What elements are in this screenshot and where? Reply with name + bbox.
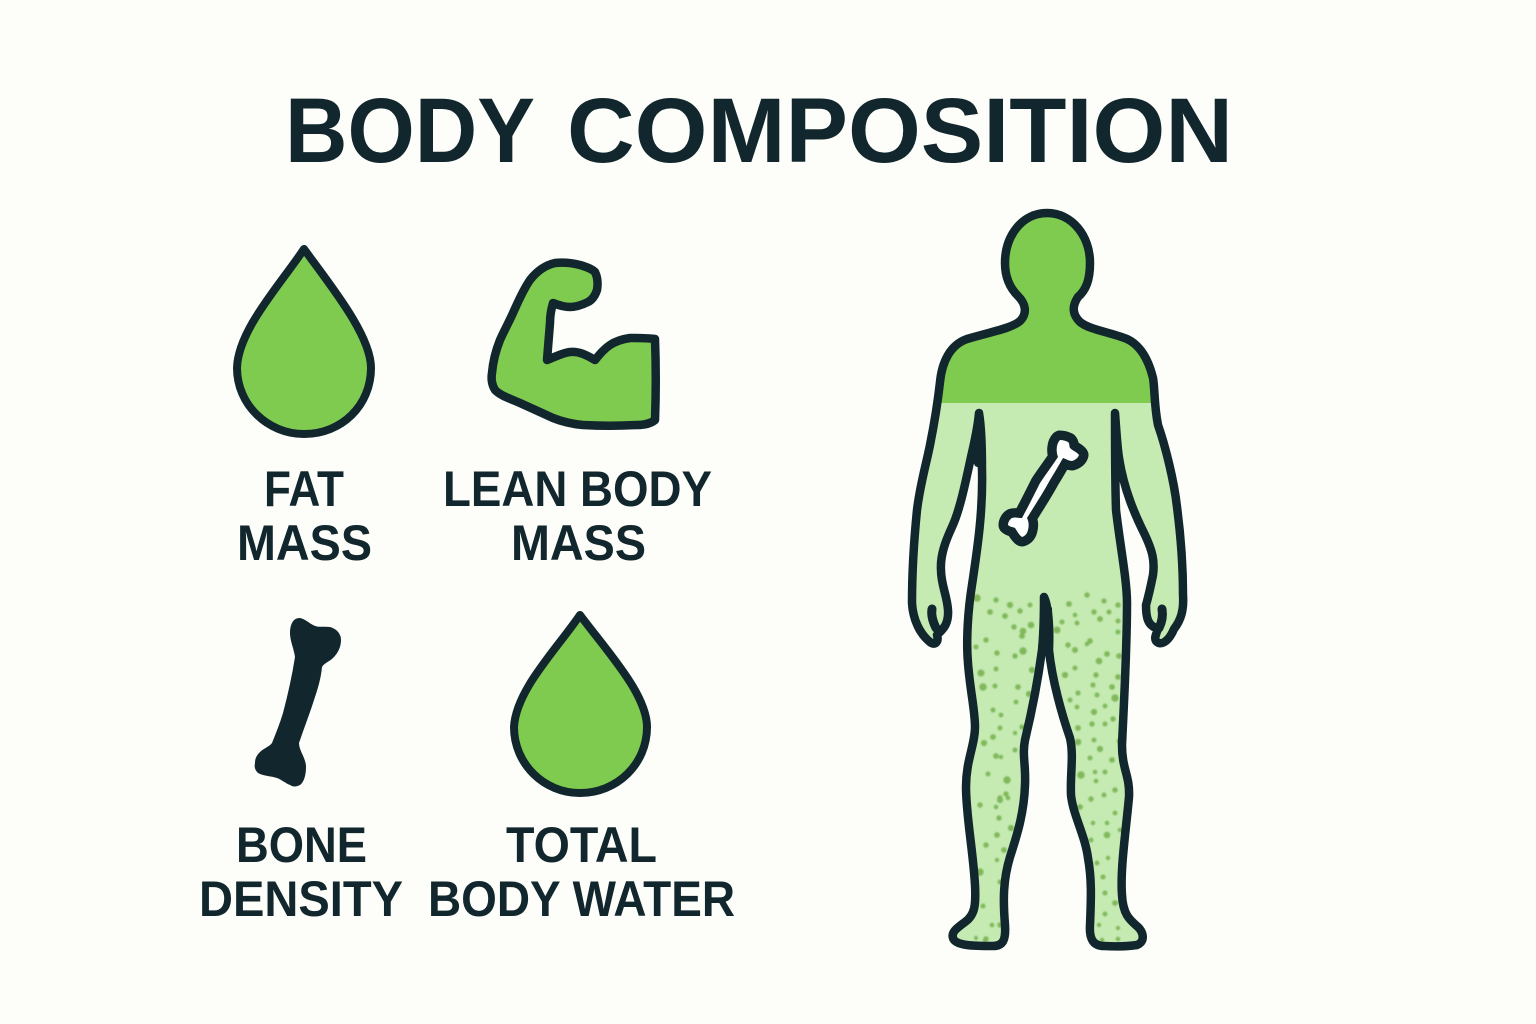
label: bone density [199, 817, 403, 927]
title: COMPOSITION [567, 80, 1233, 182]
title: BODY [285, 80, 535, 182]
left armpit wedge [971, 412, 984, 470]
right thumb [1159, 609, 1162, 628]
label: fat mass: FAT [264, 461, 344, 517]
human body figure [900, 205, 1200, 953]
icon: flexed arm muscle [492, 263, 656, 426]
leg speckles [974, 593, 1122, 942]
label: total body water: TOTAL [506, 817, 657, 873]
body outline [912, 213, 1183, 946]
right armpit wedge [1112, 412, 1120, 470]
icon: solid bone [255, 618, 341, 786]
left thumb [932, 609, 936, 628]
body fill: upper dark green zone [942, 217, 1151, 403]
crotch wedge [1040, 595, 1053, 656]
body fill: lower light green zone [916, 403, 1179, 942]
icon: fat mass drop [237, 249, 371, 434]
label: lean body mass [443, 461, 712, 571]
label: bone density: DENSITY [199, 871, 403, 927]
label: bone density: BONE [236, 817, 367, 873]
icon: total body water drop [514, 615, 647, 793]
title [285, 80, 1233, 182]
label: fat mass [237, 461, 372, 571]
label: total body water: BODY WATER [428, 871, 735, 927]
label: lean body mass: LEAN BODY [443, 461, 712, 517]
label: total body water [428, 817, 735, 927]
label: lean body mass: MASS [511, 515, 646, 571]
icon: white bone on torso [1008, 440, 1079, 537]
label: fat mass: MASS [237, 515, 372, 571]
